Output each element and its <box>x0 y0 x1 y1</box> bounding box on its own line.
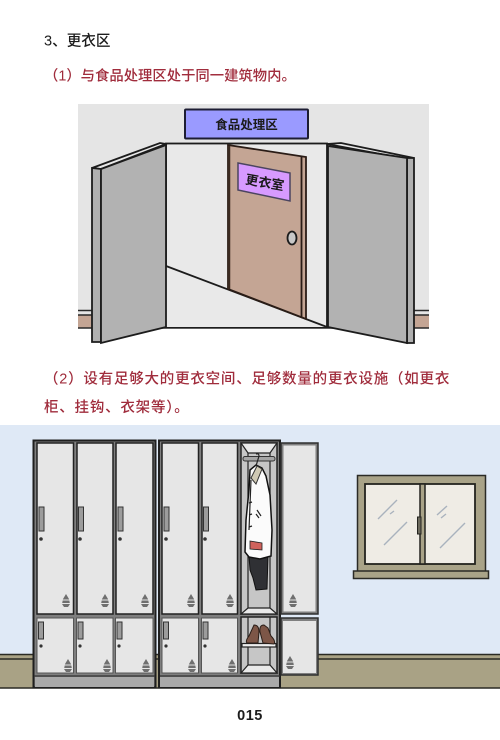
lower doors <box>37 618 153 673</box>
right open door <box>327 143 414 343</box>
locker unit: six doors <box>34 440 156 688</box>
lower doors <box>162 618 238 673</box>
heading: section title: 3、更衣区 <box>44 32 110 50</box>
door sign <box>238 163 290 201</box>
window <box>354 476 488 578</box>
door: changing room <box>228 145 306 319</box>
text: requirement 1: （1）与食品处理区处于同一建筑物内。 <box>44 66 296 84</box>
vents <box>62 594 150 672</box>
upper doors <box>162 443 238 614</box>
coat button placket <box>249 480 261 530</box>
shoes <box>246 625 275 644</box>
text: requirement 2: （2）设有足够大的更衣空间、足够数量的更衣设施（如更衣 <box>44 370 450 388</box>
door sign: 更衣室 <box>244 172 285 193</box>
white coat <box>245 465 272 559</box>
door handle <box>288 232 296 244</box>
coat collar <box>251 466 262 484</box>
hanging rod <box>243 456 275 461</box>
open lower compartment with shoes <box>241 617 277 673</box>
corridor opening <box>166 144 327 327</box>
text: requirement 2: 柜、挂钩、衣架等）。 <box>44 398 190 416</box>
door handles <box>38 507 123 639</box>
upper doors <box>37 443 153 614</box>
page number: 015 <box>237 708 263 724</box>
lock dots <box>164 537 207 648</box>
vents <box>187 594 236 672</box>
sign: food processing area <box>185 110 308 138</box>
locker unit: narrow side cabinet <box>281 443 318 675</box>
red cuff <box>250 541 262 550</box>
baseboard <box>78 310 429 328</box>
sign: food processing area: 食品处理区 <box>215 117 278 132</box>
open compartment with coat <box>241 443 277 614</box>
illustration: changing room interior <box>0 425 500 688</box>
wall background <box>0 425 500 688</box>
left open door <box>92 143 166 343</box>
locker unit: doors and open compartment <box>159 440 280 688</box>
illustration: changing room entrance <box>78 104 429 343</box>
floor skirting <box>0 654 500 688</box>
lock dots <box>39 537 122 648</box>
trousers <box>249 556 268 590</box>
wall background <box>78 104 429 328</box>
hanger hook <box>256 454 259 466</box>
text: requirement 2 <box>44 370 450 416</box>
door handles <box>164 507 208 639</box>
